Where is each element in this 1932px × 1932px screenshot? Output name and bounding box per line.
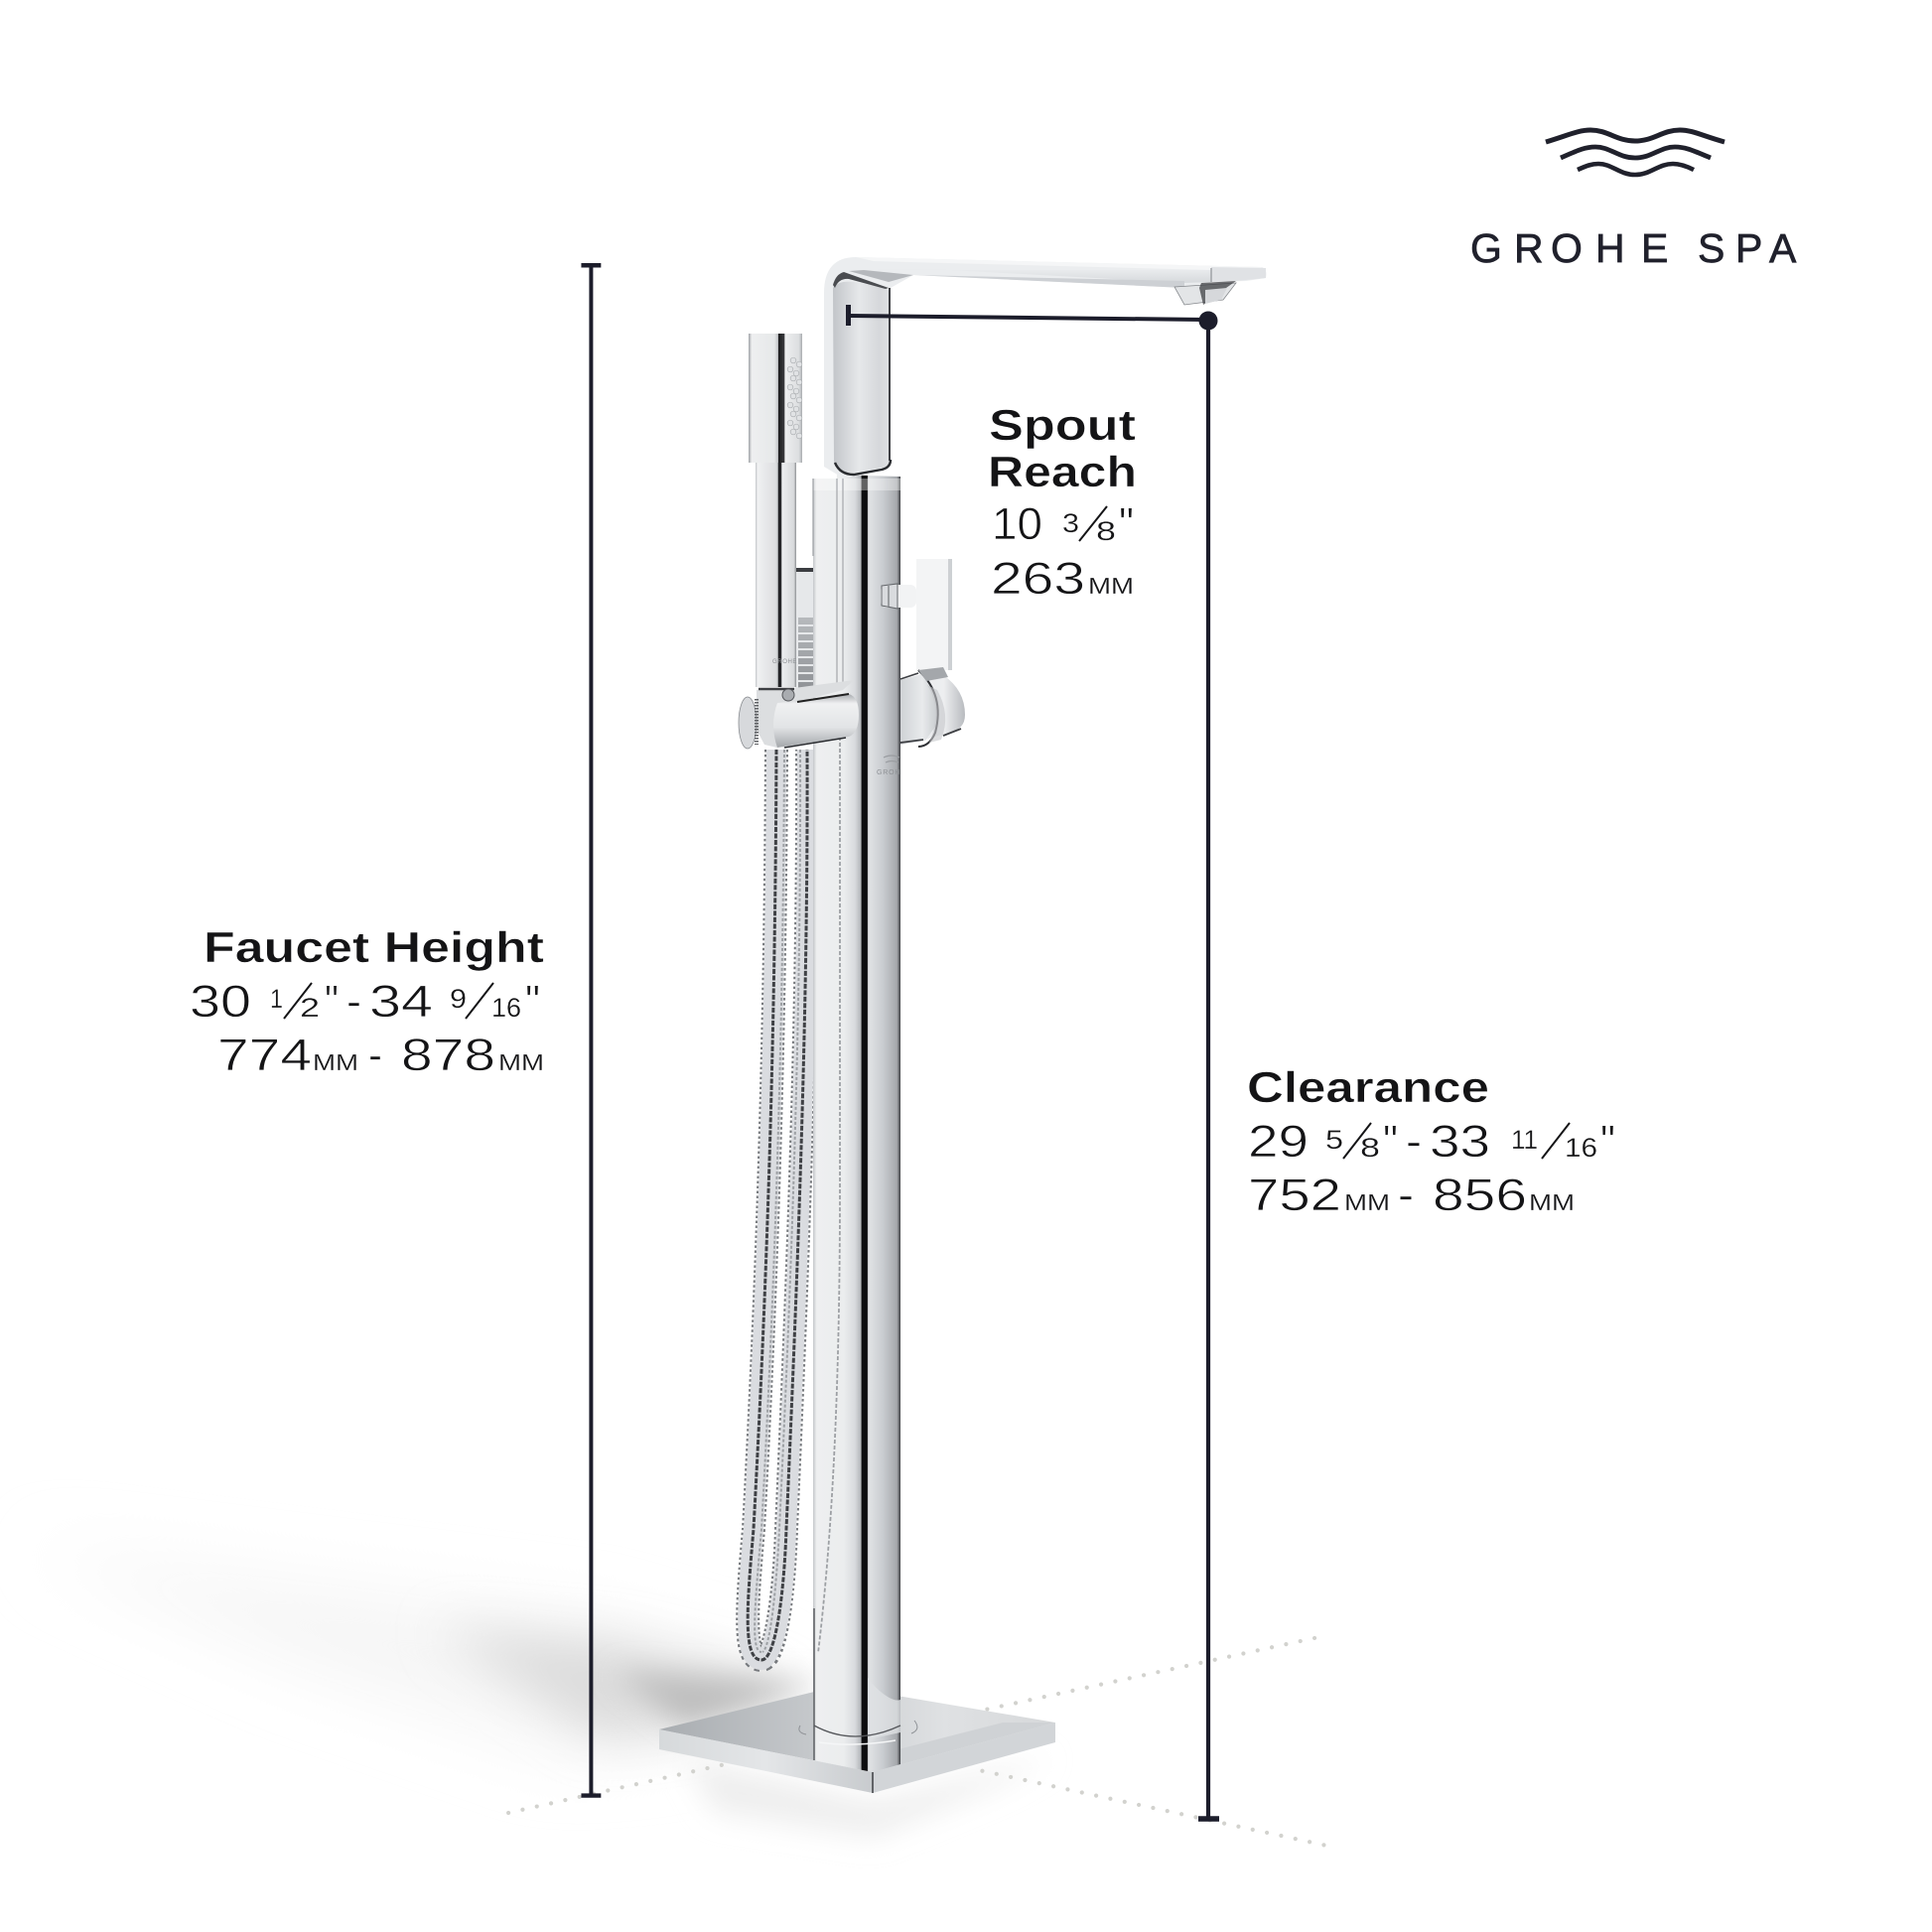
callout: clearance: " — [1383, 1116, 1398, 1167]
callout: faucet height: " — [525, 976, 540, 1027]
main column — [812, 475, 901, 1771]
base plate — [659, 1686, 1055, 1793]
callout: spout reach: 10 — [992, 498, 1042, 549]
mixer lever — [916, 559, 952, 670]
callout: faucet height: " — [325, 976, 339, 1027]
faucet illustration — [659, 257, 1266, 1793]
callout: spout reach: Reach — [988, 448, 1137, 496]
callout: faucet height: - — [368, 1030, 382, 1080]
callout: faucet height: 34 — [369, 976, 433, 1027]
dotted floor guide lines — [508, 1637, 1329, 1847]
infographic canvas — [193, 127, 1797, 1847]
logo: Grohe Spa — [1470, 130, 1797, 271]
mixer body — [900, 667, 965, 747]
hand shower head — [749, 334, 802, 463]
callout: clearance — [1247, 1063, 1615, 1220]
callout: clearance: MM — [1529, 1189, 1575, 1215]
floor shadow — [30, 1549, 1052, 1837]
icon: three water waves — [1546, 130, 1725, 175]
rear bracket with threaded connector — [795, 568, 815, 691]
shower bracket — [739, 680, 859, 749]
callout: spout reach: Spout — [989, 401, 1136, 450]
callout: spout reach: MM — [1088, 573, 1134, 599]
spout aerator — [1174, 281, 1236, 305]
callout: faucet height: 1 — [270, 984, 283, 1014]
column logo — [877, 755, 899, 774]
riser and spout — [824, 257, 1266, 479]
callout: faucet height: 878 — [401, 1030, 495, 1080]
dimension: spout reach and clearance lines — [848, 305, 1219, 1819]
callout: clearance: 856 — [1433, 1170, 1527, 1220]
callout: faucet height: 16 — [491, 993, 521, 1023]
callout: clearance: 752 — [1248, 1170, 1341, 1220]
callout: clearance: 11 — [1511, 1125, 1538, 1155]
callout: faucet height: Faucet Height — [204, 923, 544, 972]
callout: spout reach: 3 — [1062, 508, 1079, 538]
callout: faucet height: 30 — [190, 976, 251, 1027]
hose loop — [748, 750, 807, 1660]
callout: clearance: - — [1406, 1116, 1422, 1167]
callout: spout reach — [988, 401, 1137, 604]
callout: faucet height: 9 — [450, 984, 467, 1014]
callout: clearance: 5 — [1325, 1125, 1343, 1155]
callout: spout reach: " — [1119, 498, 1134, 549]
callout: clearance: MM — [1344, 1189, 1390, 1215]
callout: faucet height: - — [346, 976, 361, 1027]
callout: spout reach: 8 — [1096, 516, 1116, 546]
logo wordmark: GROHESPA — [1470, 225, 1797, 271]
callout: faucet height: MM — [313, 1049, 358, 1075]
hand shower handle — [756, 463, 797, 687]
callout: clearance: 16 — [1565, 1133, 1597, 1163]
dimension: faucet height line — [581, 265, 601, 1796]
callout: faucet height: MM — [498, 1049, 544, 1075]
callout: clearance: " — [1600, 1116, 1615, 1167]
callout: faucet height: 774 — [217, 1030, 312, 1080]
callout: clearance: 8 — [1360, 1133, 1380, 1163]
pin knob — [881, 584, 916, 609]
callout: clearance: 33 — [1430, 1116, 1490, 1167]
callout: spout reach: 263 — [991, 553, 1085, 604]
callout: faucet height: 2 — [300, 993, 320, 1023]
callout: clearance: - — [1398, 1170, 1414, 1220]
callout: clearance: Clearance — [1247, 1063, 1489, 1112]
column logo: GROHE SPA — [877, 769, 924, 776]
callout: clearance: 29 — [1248, 1116, 1309, 1167]
hand shower handle: GROHE — [772, 659, 797, 665]
callout: faucet height — [190, 923, 544, 1080]
